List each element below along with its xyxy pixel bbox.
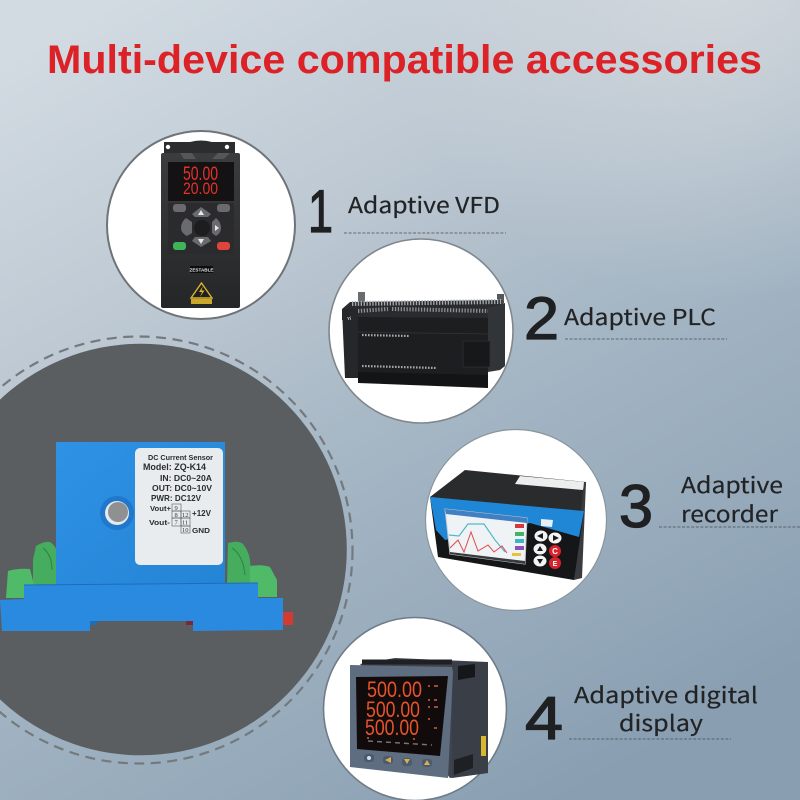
label: adaptive digital display: display — [619, 706, 704, 738]
icon: VFD device — [161, 140, 240, 308]
recorder buttons: E — [553, 561, 558, 568]
recorder buttons — [534, 519, 562, 569]
icon: PLC device: Yi — [347, 316, 351, 321]
label: adaptive recorder: Adaptive — [681, 468, 783, 500]
VFD display — [168, 162, 234, 201]
icon: digital meter — [350, 658, 488, 778]
meter screen — [356, 676, 448, 756]
specification label: 9 — [174, 505, 178, 512]
VFD display: 20.00 — [183, 179, 218, 198]
specification label: Model: ZQ-K14 — [143, 462, 206, 472]
specification label: DC Current Sensor — [148, 453, 213, 462]
label: adaptive digital display: Adaptive digital — [574, 678, 758, 710]
specification label: PWR: DC12V — [151, 493, 201, 503]
label: adaptive recorder — [619, 468, 800, 540]
panel: adaptive digital display — [324, 618, 506, 800]
specification label: Vout- — [149, 518, 171, 527]
VFD keypad — [168, 203, 234, 254]
specification label: 10 — [182, 527, 188, 534]
panel: adaptive PLC — [329, 239, 513, 423]
recorder buttons: C — [552, 547, 558, 556]
blue housing — [56, 442, 225, 586]
label: adaptive VFD: 1 — [308, 178, 333, 245]
meter screen: 500.00 — [365, 715, 419, 740]
label: adaptive digital display — [525, 678, 758, 752]
sensor panel: large dark circle with dashed ring — [0, 336, 352, 764]
label: adaptive VFD: Adaptive VFD — [348, 188, 500, 220]
label: adaptive recorder: 3 — [619, 473, 653, 540]
specification label: GND — [192, 526, 211, 535]
VFD display: 50.00 — [183, 164, 218, 185]
icon: recorder device — [430, 470, 586, 580]
specification label: +12V — [192, 509, 212, 518]
label: adaptive PLC — [524, 285, 727, 352]
specification label: Vout+ — [150, 504, 172, 513]
conductor hole — [100, 496, 134, 530]
VFD brand: ZESTABLE — [190, 268, 213, 273]
current sensor device — [0, 442, 293, 631]
panel: adaptive recorder — [426, 430, 606, 610]
specification label — [135, 448, 223, 565]
din rail base — [0, 583, 283, 631]
icon: warning triangle — [191, 283, 212, 304]
meter screen: 500.00 — [367, 677, 422, 702]
meter screen: 500.00 — [366, 697, 420, 722]
label: adaptive PLC: Adaptive PLC — [564, 300, 716, 332]
specification label: OUT: DC0~10V — [152, 483, 212, 493]
label: adaptive VFD — [308, 178, 506, 245]
specification label: 12 — [182, 512, 188, 519]
icon: PLC device — [342, 292, 505, 388]
label: adaptive digital display: 4 — [525, 685, 563, 752]
specification label: 8 — [174, 512, 178, 519]
label: adaptive PLC: 2 — [524, 285, 559, 352]
label: adaptive recorder: recorder — [681, 497, 779, 529]
specification label: IN: DC0~20A — [160, 473, 212, 483]
title: Multi-device compatible accessories — [47, 38, 762, 82]
green terminals — [6, 542, 277, 598]
recorder screen — [445, 509, 527, 564]
red clip — [283, 612, 293, 625]
specification label: 11 — [182, 520, 188, 526]
panel: adaptive VFD — [107, 131, 295, 319]
meter buttons — [364, 754, 432, 767]
specification label: 7 — [174, 520, 178, 526]
